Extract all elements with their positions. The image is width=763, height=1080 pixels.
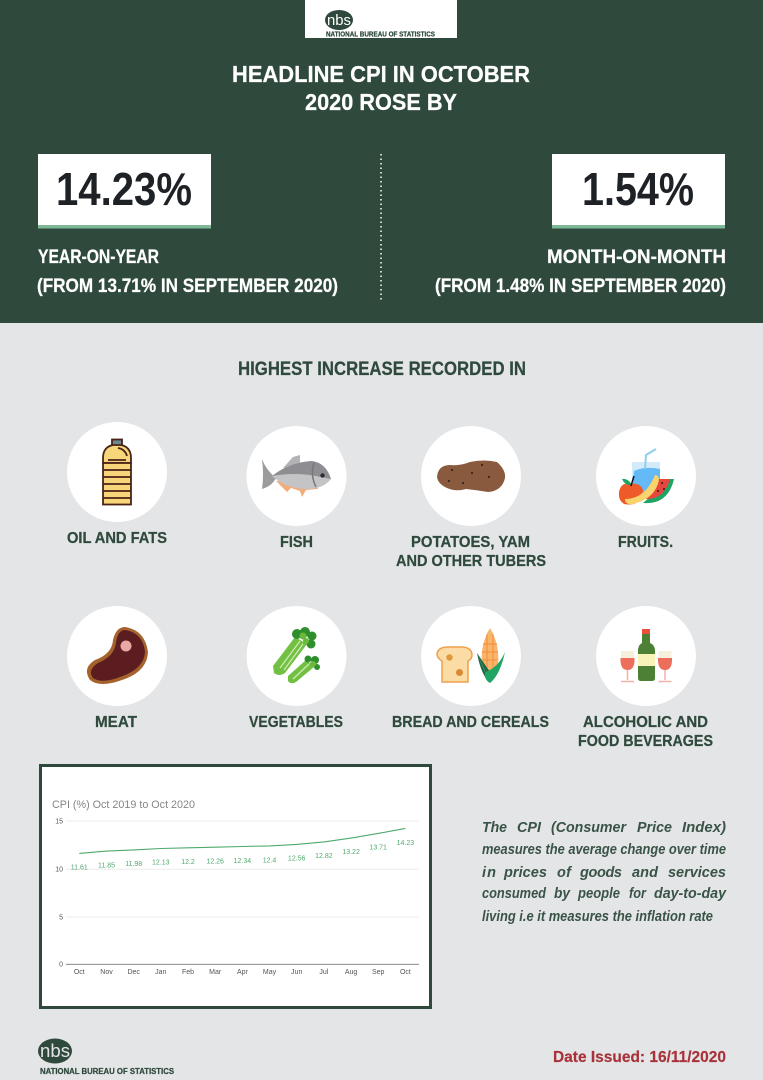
item: alcoholic and food beverages: FOOD BEVERAGES xyxy=(578,733,713,750)
item: alcoholic and food beverages xyxy=(578,606,713,750)
x axis labels: Oct xyxy=(400,969,411,976)
month-on-month text: MONTH-ON-MONTH xyxy=(547,246,726,268)
x axis labels: Jan xyxy=(155,969,167,976)
year-on-year text xyxy=(37,246,338,297)
x axis labels: Jun xyxy=(291,969,302,976)
y axis labels xyxy=(55,818,63,968)
heading: highest increase: HIGHEST INCREASE RECORDED IN xyxy=(238,359,526,380)
chart title: CPI (%) Oct 2019 to Oct 2020 xyxy=(52,799,195,811)
x axis labels: Apr xyxy=(237,969,249,976)
y axis labels: 0 xyxy=(59,962,63,968)
text block: CPI definition: prices xyxy=(503,865,547,881)
data labels xyxy=(71,840,414,872)
item: potatoes xyxy=(396,426,546,570)
text block: CPI definition: services xyxy=(668,865,726,881)
panel: header xyxy=(0,0,763,323)
text block: CPI definition: living i.e it measures the inflation rate xyxy=(482,909,713,925)
logo: top NBS: NATIONAL BUREAU OF STATISTICS xyxy=(326,30,435,38)
data labels: 11.85 xyxy=(98,862,115,870)
x axis labels: Mar xyxy=(209,969,222,976)
text block: CPI definition: day-to-day xyxy=(654,886,727,902)
x axis labels: Nov xyxy=(100,969,113,976)
text block: CPI definition: people xyxy=(577,886,620,902)
item: fish: FISH xyxy=(280,534,313,551)
text block: CPI definition xyxy=(482,820,727,925)
icon: fruits xyxy=(619,449,674,504)
icon: bread xyxy=(437,647,472,682)
title: HEADLINE CPI IN OCTOBER xyxy=(232,61,530,87)
year-on-year text: YEAR-ON-YEAR xyxy=(38,246,159,268)
y axis labels: 5 xyxy=(59,914,63,922)
item: bread and cereals xyxy=(392,606,549,731)
item: alcoholic and food beverages: ALCOHOLIC AND xyxy=(583,714,708,731)
icon: wine glasses xyxy=(620,651,672,682)
data labels: 11.61 xyxy=(71,864,88,872)
logo: top NBS xyxy=(305,0,457,38)
x axis labels: Feb xyxy=(182,969,194,976)
icon: celery xyxy=(273,627,320,683)
month-on-month text xyxy=(435,246,726,297)
data labels: 12.4 xyxy=(263,858,276,864)
x axis labels xyxy=(74,969,411,976)
x axis labels: Sep xyxy=(372,969,385,976)
text block: CPI definition: goods xyxy=(579,865,622,881)
y axis labels: 15 xyxy=(55,818,63,826)
text block: CPI definition: The xyxy=(482,820,507,836)
data labels: 12.26 xyxy=(206,858,224,866)
text block: CPI definition: for xyxy=(629,886,647,902)
x axis labels: Aug xyxy=(345,969,357,976)
icon: steak xyxy=(87,627,148,684)
icon: oil bottle xyxy=(103,440,131,504)
text block: CPI definition: and xyxy=(632,865,659,881)
item: fruits xyxy=(596,426,696,551)
stat card: month-on-month value: 1.54% xyxy=(582,163,694,215)
logo: bottom NBS: NATIONAL BUREAU OF STATISTICS xyxy=(40,1067,175,1076)
icon: corn xyxy=(477,628,505,683)
data labels: 12.56 xyxy=(288,856,306,862)
text block: CPI definition: Price xyxy=(637,820,672,836)
stat card: year-on-year value: 14.23% xyxy=(56,163,192,215)
data line xyxy=(79,828,405,853)
year-on-year text: (FROM 13.71% IN SEPTEMBER 2020) xyxy=(37,275,338,297)
item: oil and fats: OIL AND FATS xyxy=(67,530,167,547)
text block: CPI definition: Index) xyxy=(682,820,726,836)
item: vegetables xyxy=(246,606,346,731)
text block: CPI definition: CPI xyxy=(517,820,542,836)
item: vegetables: VEGETABLES xyxy=(249,714,343,731)
item: meat xyxy=(67,606,167,731)
data labels: 13.71 xyxy=(369,844,387,852)
data labels: 12.82 xyxy=(315,853,333,860)
x axis labels: May xyxy=(263,969,277,976)
icon: wine bottle xyxy=(638,629,655,681)
data labels: 14.23 xyxy=(397,840,414,847)
text block: CPI definition: measures the average change over time xyxy=(482,842,726,858)
stat card: month-on-month value xyxy=(552,154,725,228)
y axis labels: 10 xyxy=(55,866,63,874)
icon: fish xyxy=(262,455,331,497)
text block: CPI definition: of xyxy=(557,865,573,881)
data labels: 12.2 xyxy=(181,859,195,866)
text block: CPI definition: (Consumer xyxy=(551,820,627,836)
x axis labels: Dec xyxy=(127,969,140,976)
line chart: CPI xyxy=(40,766,430,1008)
data labels: 13.22 xyxy=(342,849,360,856)
item: fruits: FRUITS. xyxy=(618,534,673,551)
item: fish xyxy=(246,426,346,551)
date issued: Date Issued: 16/11/2020 xyxy=(553,1049,726,1066)
data labels: 12.34 xyxy=(234,858,251,865)
item: bread and cereals: BREAD AND CEREALS xyxy=(392,714,549,731)
x axis labels: Oct xyxy=(74,969,85,976)
data labels: 11.98 xyxy=(125,861,142,868)
title: 2020 ROSE BY xyxy=(305,89,457,115)
item: potatoes: POTATOES, YAM xyxy=(411,534,530,551)
data labels: 12.13 xyxy=(152,860,170,866)
text block: CPI definition: in xyxy=(482,865,496,881)
title xyxy=(232,61,530,115)
item: oil and fats xyxy=(67,422,167,547)
logo: top NBS: nbs xyxy=(327,12,351,29)
month-on-month text: (FROM 1.48% IN SEPTEMBER 2020) xyxy=(435,275,726,297)
logo: bottom NBS xyxy=(38,1038,175,1076)
item: meat: MEAT xyxy=(95,714,138,731)
logo: bottom NBS: nbs xyxy=(40,1041,70,1061)
stat card: year-on-year value xyxy=(38,154,211,228)
icon: potato xyxy=(437,460,505,492)
x axis labels: Jul xyxy=(319,969,329,976)
text block: CPI definition: by xyxy=(554,886,571,902)
item: potatoes: AND OTHER TUBERS xyxy=(396,553,546,570)
text block: CPI definition: consumed xyxy=(482,886,547,902)
